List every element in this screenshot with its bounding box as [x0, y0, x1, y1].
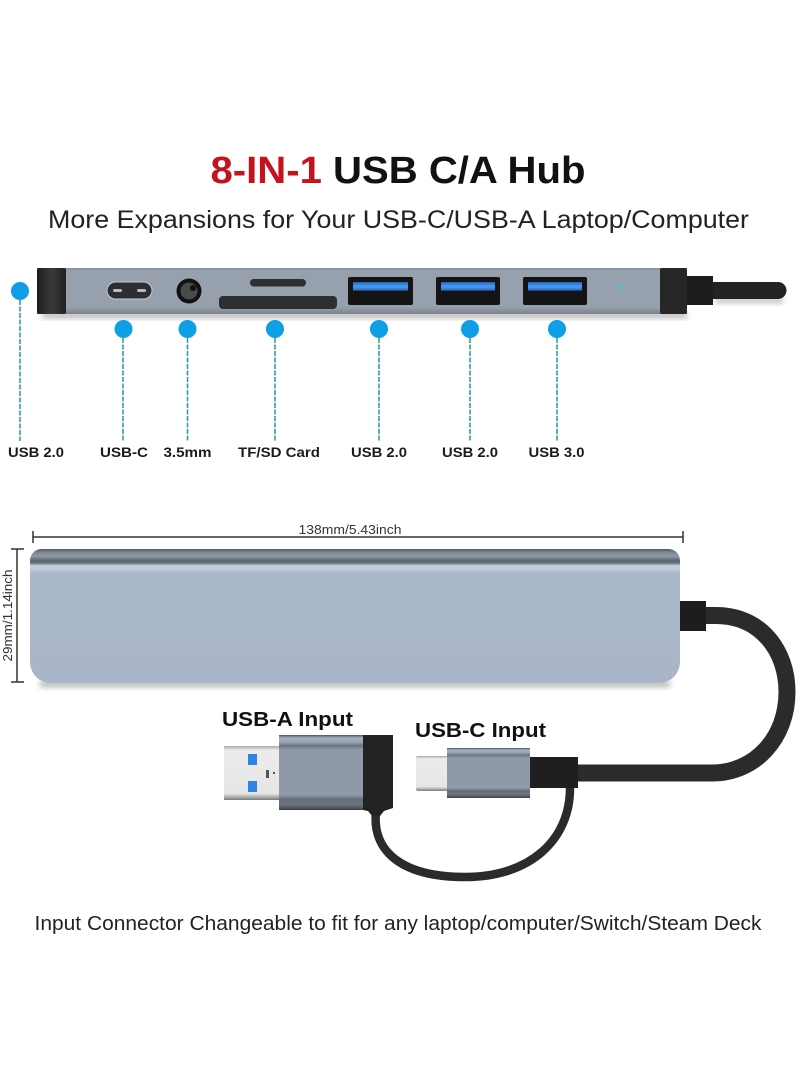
- port: 3.5mm jack: [176, 278, 202, 304]
- title: 8-IN-1 USB C/A Hub: [210, 150, 586, 192]
- height dimension: [0, 549, 24, 682]
- callout: TF/SD Card: TF/SD Card: [238, 444, 320, 460]
- callout: USB 2.0 second A port: [442, 320, 498, 460]
- USB-C input label: USB-C Input: [415, 720, 546, 742]
- callout: USB 2.0 first A port: [351, 320, 407, 460]
- callout: USB 3.0: [528, 320, 585, 460]
- strain relief: [687, 276, 713, 305]
- subtitle: More Expansions for Your USB-C/USB-A Laptop/Computer: [48, 206, 749, 234]
- port: SD slot: [219, 296, 337, 309]
- USB-A plug: [224, 746, 280, 800]
- USB-A input label: USB-A Input: [222, 709, 353, 731]
- callout: TF/SD Card: [238, 320, 320, 460]
- port: USB-A 1: [348, 277, 413, 305]
- USB-C metal shell: [447, 748, 530, 798]
- callout: USB 2.0 first A port: USB 2.0: [351, 444, 407, 460]
- callout: USB 2.0 left: [8, 282, 64, 460]
- right cable cap: [660, 268, 687, 314]
- indicator LED: [618, 285, 622, 289]
- USB-C black housing: [530, 757, 578, 788]
- port: USB-C: [107, 282, 152, 299]
- left cable cap: [37, 268, 66, 314]
- USB-A metal shell: [279, 735, 363, 810]
- cable end: [713, 282, 786, 299]
- footer caption: Input Connector Changeable to fit for any laptop/computer/Switch/Steam Deck: [34, 913, 763, 935]
- port: USB-A 2: [436, 277, 500, 305]
- hub: front view with ports: [37, 268, 786, 318]
- hub plate: [30, 549, 680, 683]
- callout: USB 2.0 left: USB 2.0: [8, 444, 64, 460]
- callout: 3.5mm: 3.5mm: [164, 444, 212, 460]
- USB-C plug: [416, 756, 448, 791]
- hub body: [37, 268, 687, 314]
- callout: USB 2.0 second A port: USB 2.0: [442, 444, 498, 460]
- callout: USB-C: [100, 320, 148, 460]
- USB-A black housing: [363, 735, 393, 816]
- width dimension: 138mm/5.43inch: [298, 522, 402, 537]
- main cable: [570, 616, 787, 773]
- callout: 3.5mm: [164, 320, 212, 460]
- strain relief: [680, 601, 706, 631]
- port: TF slot: [250, 279, 306, 286]
- hub: top view with cable: [30, 549, 787, 773]
- height dimension: 29mm/1.14inch: [0, 570, 15, 662]
- port: USB-A 3: [523, 277, 587, 305]
- callout: USB 3.0: USB 3.0: [528, 444, 585, 460]
- callout: USB-C: USB-C: [100, 444, 148, 460]
- adapter: connectors and Y cable: [224, 735, 578, 877]
